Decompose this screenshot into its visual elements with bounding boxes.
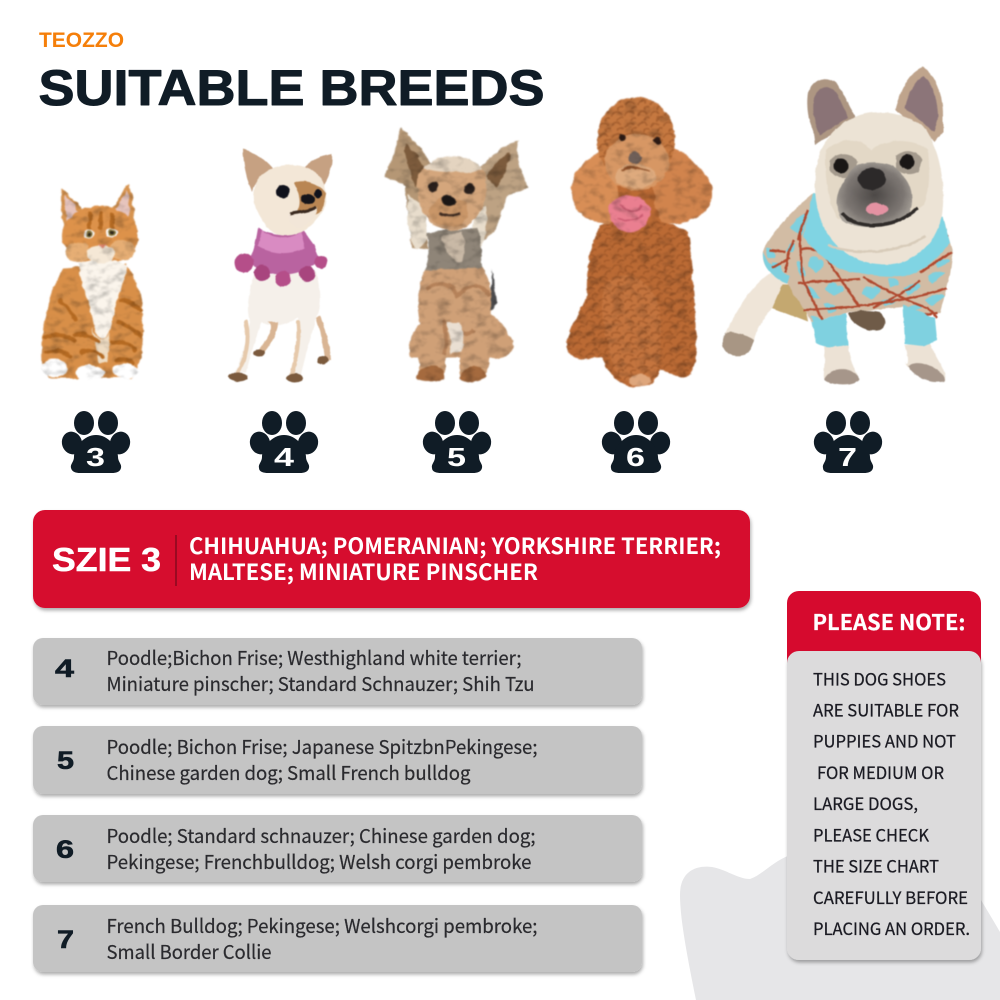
size 3 label: SZIE 3 [52,541,161,578]
row: size 5: Chinese garden dog; Small French bulldog [106,759,471,786]
row: size 6 [33,815,642,882]
size icon: paw 5 [420,411,494,473]
note body text: FOR MEDIUM OR [817,759,944,784]
photo: french bulldog in turquoise sweater [722,67,953,385]
note body text: THIS DOG SHOES [813,666,946,690]
brand logo: TEOZZO [39,28,124,52]
row: size 5 [33,726,642,794]
photo: orange kitten [41,183,143,380]
row: size 6: 6 [56,836,74,864]
row: size 6: Pekingese; Frenchbulldog; Welsh corgi pembroke [106,848,532,875]
panel: please note [787,591,981,960]
photo: red poodle with pink flower [566,97,712,387]
row: size 7: French Bulldog; Pekingese; Welshcorgi pembroke; [106,912,538,939]
size icon: paw 3 [59,411,133,473]
panel: size 3 banner [33,510,750,608]
size icon: paw 7: 7 [838,442,857,472]
note heading: PLEASE NOTE: [812,606,966,637]
row: size 5: Poodle; Bichon Frise; Japanese SpitzbnPekingese; [106,733,538,760]
size icon: paw 6: 6 [626,442,645,472]
note body text: PLEASE CHECK [813,822,929,846]
photo: chihuahua with pink collar [228,149,332,382]
note body text: THE SIZE CHART [813,852,939,878]
row: size 4: Miniature pinscher; Standard Schnauzer; Shih Tzu [106,670,534,697]
note body text: LARGE DOGS, [813,790,918,815]
row: size 4 [33,638,642,705]
size icon: paw 4 [247,411,321,473]
row: size 6: Poodle; Standard schnauzer; Chinese garden dog; [106,822,536,849]
photo: yorkshire terrier [384,128,527,382]
note body text: PUPPIES AND NOT [813,728,956,752]
row: size 4: Poodle;Bichon Frise; Westhighland white terrier; [106,644,522,671]
note body text: ARE SUITABLE FOR [813,696,959,722]
row: size 5: 5 [57,747,74,775]
row: size 7: Small Border Collie [106,938,272,965]
size 3 breeds: MALTESE; MINIATURE PINSCHER [189,555,538,587]
note body text: CAREFULLY BEFORE [813,884,968,909]
title: SUITABLE BREEDS [38,60,544,116]
row: size 4: 4 [55,655,74,683]
size icon: paw 3: 3 [86,442,105,472]
background blob [680,855,1000,1000]
size icon: paw 4: 4 [274,442,295,472]
size icon: paw 6 [599,411,673,473]
size icon: paw 5: 5 [447,442,466,472]
size icon: paw 7 [811,411,885,473]
row: size 7: 7 [57,926,74,954]
row: size 7 [33,905,642,972]
note body text: PLACING AN ORDER. [813,915,970,940]
size 3 breeds: CHIHUAHUA; POMERANIAN; YORKSHIRE TERRIER; [189,529,721,561]
